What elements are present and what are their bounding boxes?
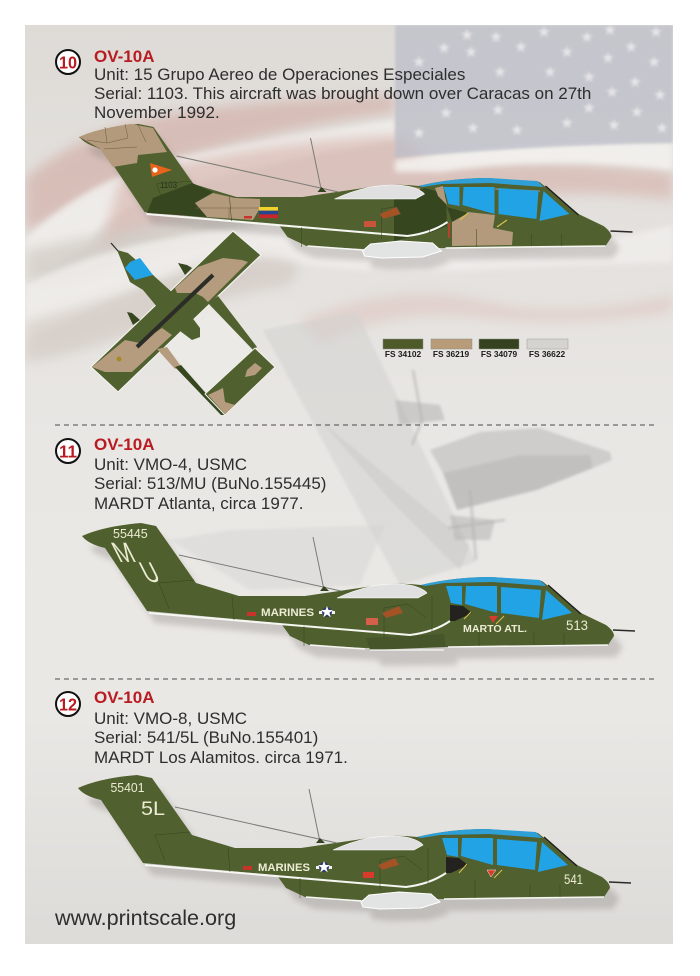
text block 11: Unit: VMO-4, USMC [94,455,247,474]
tailplane [205,348,275,415]
text block 12: Unit: VMO-8, USMC [94,709,247,728]
tan wing sections [175,258,248,302]
colour swatches legend: FS 36219 [433,349,469,359]
badge 10: 10 [59,52,77,72]
markings 11 [106,527,588,635]
markings 12: MARINES [258,862,310,874]
dashed divider 1 [55,424,656,426]
aircraft 10 top view [91,231,275,415]
badge 11: 11 [59,442,77,462]
fuselage [117,250,200,340]
text block 11: Serial: 513/MU (BuNo.155445) [94,474,326,493]
shadow 12 [87,787,619,921]
text block 11: MARDT Atlanta, circa 1977. [94,494,303,513]
markings 11: MARINES [261,607,314,619]
text block 12: Serial: 541/5L (BuNo.155401) [94,728,318,747]
text block 10 [94,47,591,122]
details 12 [145,789,631,901]
markings 12 [110,781,583,887]
text block 11: OV-10A [94,435,154,454]
fuselage 11 [82,523,614,650]
canopy 12 [417,829,577,872]
aircraft 12 side view [78,775,631,921]
text block 10: OV-10A [94,47,154,66]
details 11 [149,537,635,649]
badge 11 [56,439,80,463]
badge 12 [56,692,80,716]
markings 11: M [106,536,141,568]
shadow 11 [90,535,622,666]
tail box [167,305,255,393]
camouflage 10: 1103 [160,180,177,190]
markings 12: 541 [564,871,583,887]
colour swatches legend: FS 36622 [529,349,565,359]
markings 11: U [134,556,165,588]
badge 10 [56,50,80,74]
text block 12: MARDT Los Alamitos. circa 1971. [94,748,348,767]
website footer: www.printscale.org [54,905,236,930]
shadow 10 [87,136,619,270]
flag canton [395,25,673,158]
text block 12 [94,688,348,767]
badge 12: 12 [59,694,77,714]
details 10 [146,138,632,250]
background: ghost grey aircraft [170,312,612,590]
flag stars [413,24,668,138]
canopy 11 [421,577,581,620]
fuselage 10 [80,124,612,258]
canopy top [125,258,153,280]
canopy 10 [418,178,578,221]
colour swatches legend [383,339,568,359]
markings 11: 513 [566,617,588,633]
text block 11 [94,435,326,513]
camouflage 10 [79,124,540,246]
wing spine [137,275,213,347]
wing [91,231,261,392]
aircraft 10 side view (camouflage) [79,124,632,270]
markings 12: 55401 [110,781,145,795]
text block 12: OV-10A [94,688,154,707]
markings 12: 5L [141,799,165,820]
colour swatches legend: FS 34102 [385,349,421,359]
text block 10: Serial: 1103. This aircraft was brought down over Caracas on 27th [94,84,591,103]
aircraft 11 side view [82,523,635,666]
text block 10: Unit: 15 Grupo Aereo de Operaciones Especiales [94,65,465,84]
cockpit marks 10 [460,213,507,227]
colour swatches legend: FS 34079 [481,349,517,359]
text block 10: November 1992. [94,103,220,122]
background: American flag [25,24,673,590]
markings 11: 55445 [113,527,148,541]
booms [208,296,257,350]
dashed divider 2 [55,678,656,680]
markings 11: MARTO ATL. [463,624,527,635]
fuselage 12 [78,775,610,909]
